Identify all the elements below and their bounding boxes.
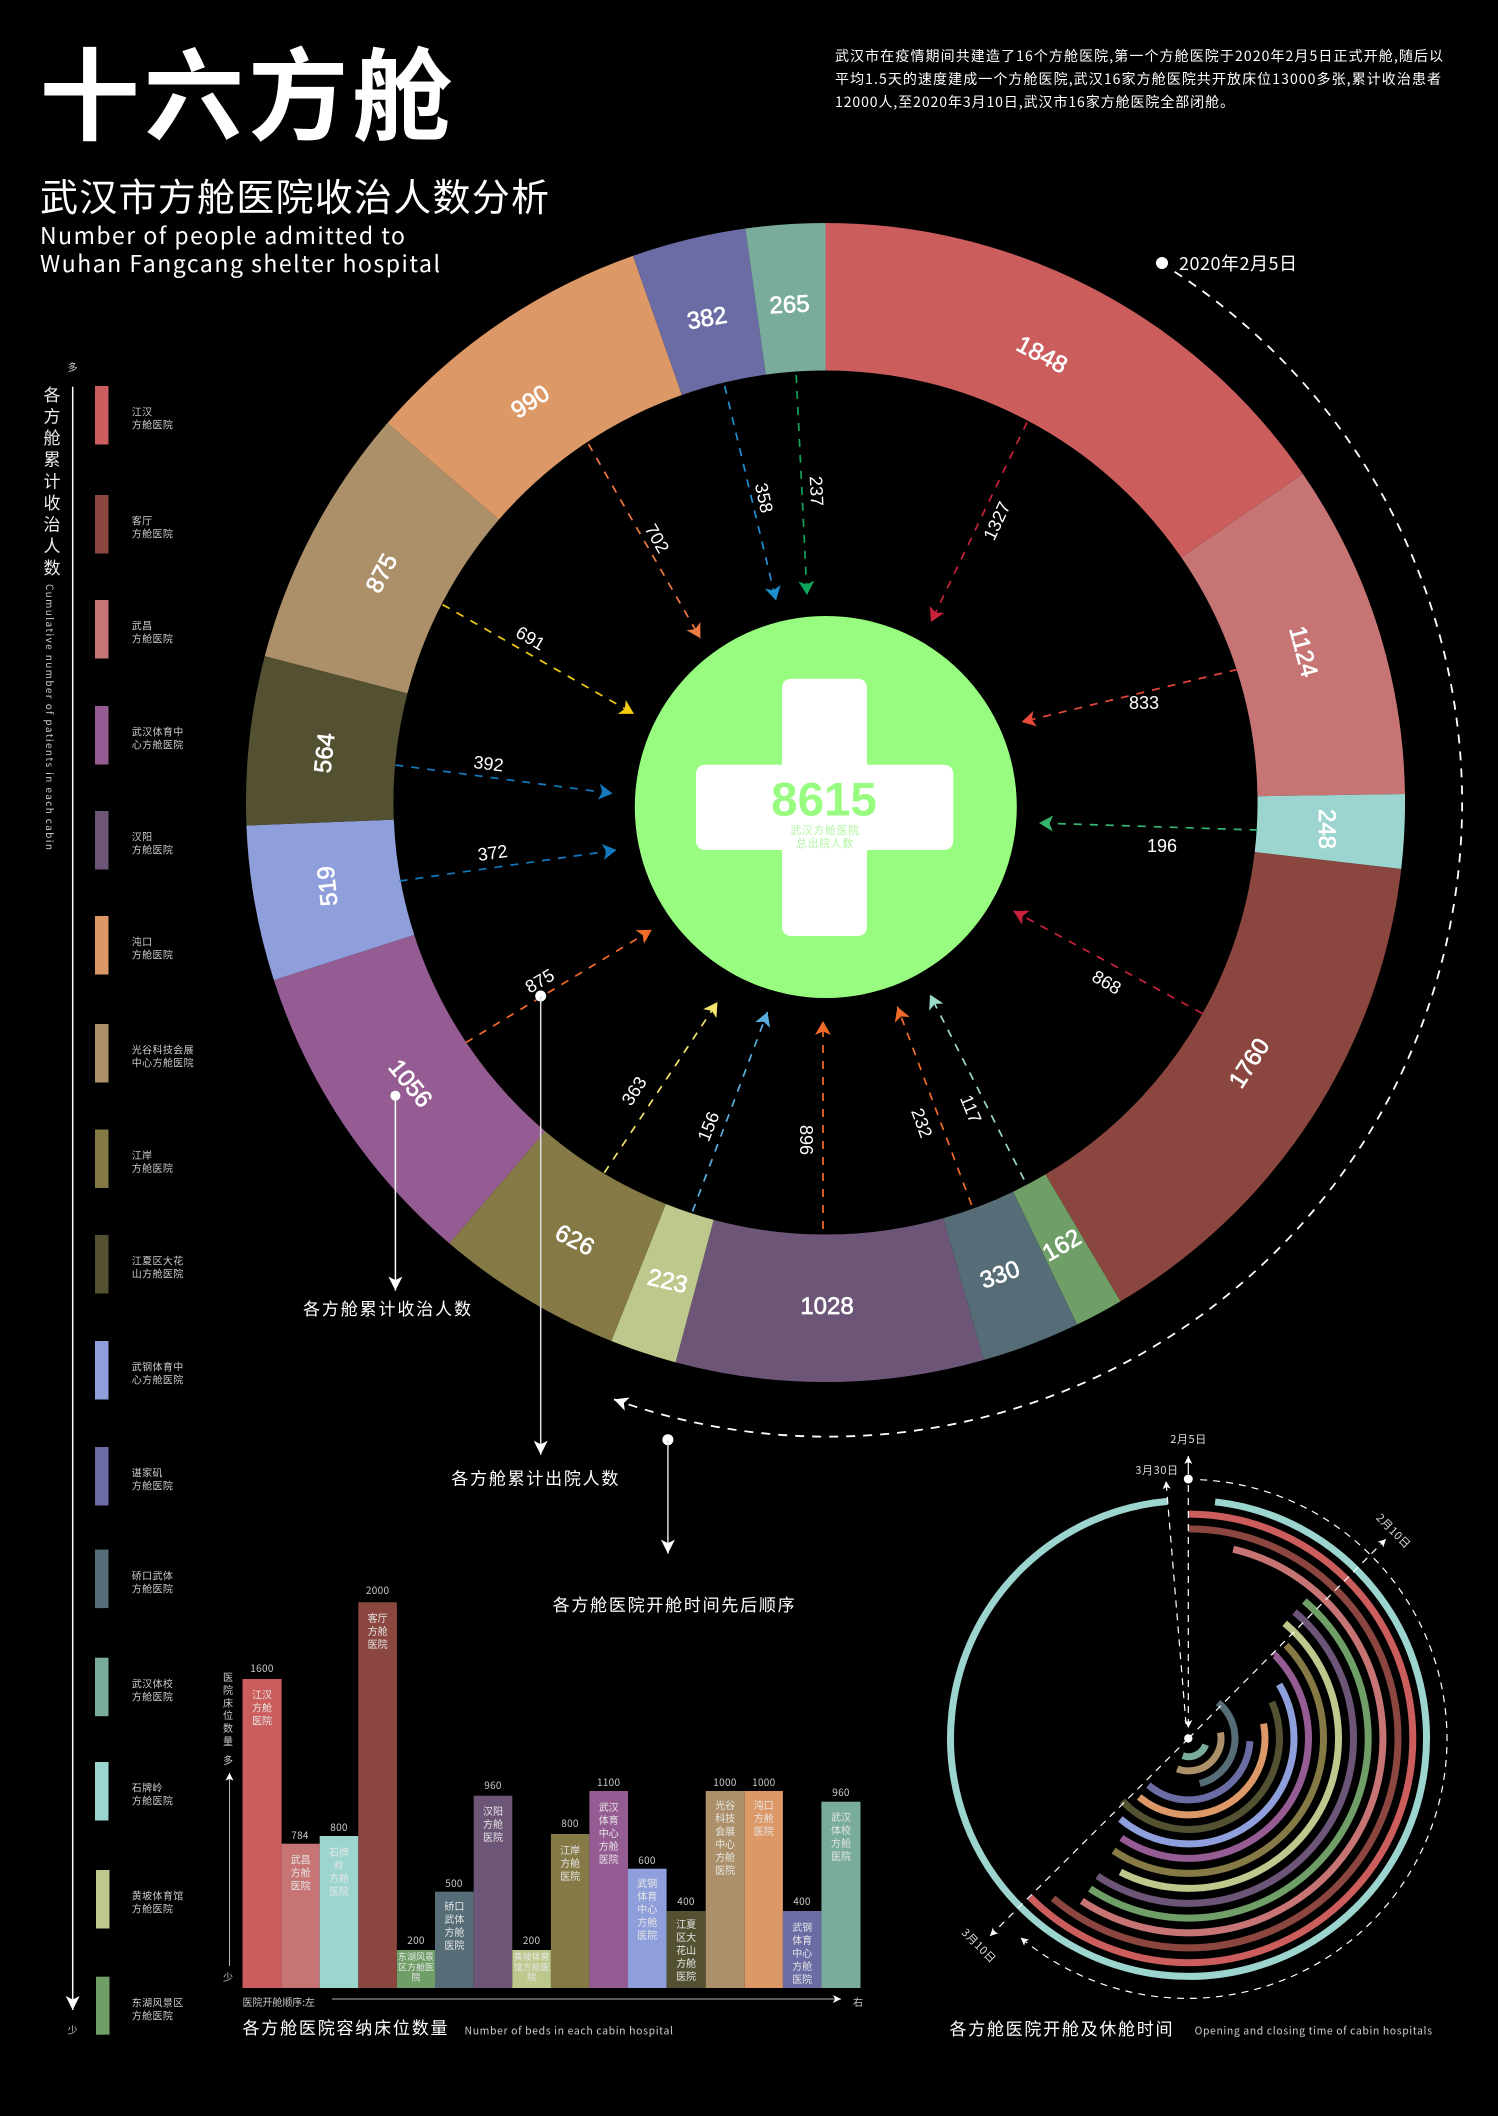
- bar names: 汉阳: [483, 1803, 503, 1818]
- bar names: 中心: [715, 1836, 735, 1851]
- left legend: axis and title: [43, 359, 78, 2037]
- bar names: 医院: [715, 1862, 735, 1877]
- donut segment values: 248: [1313, 809, 1340, 849]
- bar values: [250, 1582, 850, 1947]
- bar names: 武钢: [792, 1919, 812, 1934]
- discharge arrow values: 896: [796, 1125, 816, 1155]
- left legend: hospital swatches: 方舱医院: [132, 631, 173, 646]
- bar chart heading: [242, 2014, 673, 2039]
- bar names: 武昌: [291, 1852, 311, 1866]
- bar names: 医院: [444, 1937, 464, 1952]
- bar values: 784: [291, 1827, 309, 1842]
- radial chart date labels: 3月30日: [1135, 1462, 1179, 1478]
- bar names: 方舱: [368, 1623, 388, 1638]
- left legend: hospital swatches: 武昌: [132, 618, 153, 633]
- donut segment values: 519: [312, 865, 344, 907]
- bar values: 1100: [597, 1774, 621, 1789]
- discharge arrow values: 232: [907, 1105, 936, 1141]
- bar names: 医院: [252, 1712, 272, 1728]
- callout: cumulative admissions: 各方舱累计收治人数: [303, 1295, 471, 1320]
- left legend: hospital swatches: 方舱医院: [132, 417, 173, 432]
- donut segment values: 875: [361, 549, 403, 598]
- intro paragraph: 12000人,至2020年3月10日,武汉市16家方舱医院全部闭舱。: [835, 92, 1234, 112]
- bar names: 石牌: [329, 1844, 349, 1859]
- bar values: 1000: [752, 1774, 776, 1789]
- bar values: 1600: [250, 1660, 274, 1675]
- dashed arc arrow: [614, 272, 1462, 1437]
- vertical chinese title: 各方舱累计收治人数: [44, 381, 60, 579]
- left legend: hospital swatches: 方舱医院: [132, 1688, 173, 1703]
- vertical english title: Cumulative number of patients in each cabin: [43, 584, 58, 850]
- bar values: 600: [638, 1852, 656, 1867]
- bar names: 东湖风景: [398, 1950, 434, 1963]
- radial chart date labels: 3月10日: [958, 1925, 1000, 1967]
- donut segment values: 1124: [1283, 623, 1323, 680]
- english subtitle: Number of people admitted to: [40, 217, 405, 251]
- left legend: hospital swatches: 客厅: [132, 513, 153, 528]
- callout: cumulative discharges: [451, 990, 618, 1490]
- bar names: 方舱: [637, 1914, 657, 1929]
- bar names: 医院: [599, 1851, 619, 1866]
- bar names: 沌口: [754, 1797, 774, 1812]
- y axis: [223, 1669, 233, 1984]
- intro paragraph: 平均1.5天的速度建成一个方舱医院,武汉16家方舱医院共开放床位13000多张,累计收治患者: [835, 69, 1441, 89]
- left legend: hospital swatches: 石牌岭: [132, 1780, 163, 1795]
- bar names: 医院: [329, 1883, 349, 1898]
- bar names: 医院: [754, 1823, 774, 1838]
- bar names: 硚口: [444, 1898, 464, 1913]
- discharge arrow values: 363: [618, 1073, 651, 1109]
- bar names: 武钢: [637, 1875, 657, 1890]
- radial chart heading: 各方舱医院开舱及休舱时间: [950, 2015, 1172, 2040]
- bar names: 客厅: [368, 1610, 388, 1625]
- donut segment values: 1848: [1012, 331, 1072, 379]
- bar chart heading: 各方舱医院容纳床位数量: [242, 2014, 448, 2039]
- left legend: hospital swatches: 方舱医院: [132, 1160, 173, 1175]
- bar names: 体育: [637, 1888, 657, 1903]
- bar names: 方舱: [483, 1816, 503, 1831]
- x axis: 医院开舱顺序:左: [242, 1994, 315, 2009]
- radial chart heading: [950, 2015, 1432, 2040]
- discharge arrow values: 392: [472, 752, 505, 776]
- left legend: hospital swatches: 东湖风景区: [132, 1994, 184, 2009]
- left legend: hospital swatches: 硚口武体: [132, 1567, 173, 1582]
- callout: cumulative admissions: [303, 1091, 471, 1320]
- left legend: hospital swatches: 江岸: [132, 1147, 153, 1162]
- donut segment values: [309, 290, 1340, 1320]
- discharge arrow values: 156: [694, 1109, 723, 1144]
- bar values: 500: [445, 1875, 463, 1890]
- dashed radial guides: [990, 1480, 1447, 1998]
- bar names: 体育: [792, 1932, 812, 1947]
- bar names: 医院: [676, 1968, 696, 1983]
- callout: cumulative discharges: 各方舱累计出院人数: [451, 1464, 618, 1490]
- intro paragraph: [835, 46, 1443, 112]
- callout: opening order: [553, 1434, 795, 1616]
- left legend: hospital swatches: 心方舱医院: [132, 737, 184, 752]
- bar names: 方舱: [676, 1955, 696, 1970]
- discharge arrow values: 702: [641, 520, 673, 557]
- bar values: 2000: [366, 1582, 389, 1597]
- bar values: 400: [677, 1893, 695, 1908]
- left legend: hospital swatches: 方舱医院: [132, 1901, 173, 1916]
- bars: [242, 1602, 860, 1988]
- bar names: 区方舱医: [398, 1960, 434, 1973]
- bar names: 方舱: [792, 1958, 812, 1973]
- x axis: 右: [853, 1994, 863, 2009]
- donut segment values: 564: [309, 732, 341, 774]
- bar names: 院: [411, 1971, 421, 1984]
- bar names: 花山: [676, 1942, 696, 1957]
- left legend: hospital swatches: 汉阳: [132, 829, 153, 844]
- left legend: hospital swatches: 方舱医院: [132, 842, 173, 857]
- bar names: 武体: [444, 1911, 464, 1926]
- bar chart: beds in each hospital: [223, 1582, 863, 2009]
- discharge arrow values: 691: [512, 622, 548, 654]
- bar values: 200: [523, 1932, 541, 1947]
- left legend: hospital swatches: 方舱医院: [132, 2007, 173, 2022]
- chinese subtitle: 武汉市方舱医院收治人数分析: [40, 167, 549, 222]
- bar chart heading: Number of beds in each cabin hospital: [464, 2024, 673, 2038]
- more label: 多: [68, 359, 78, 374]
- title: 十六方舱: [40, 16, 452, 161]
- bar names: 黄坡体育: [514, 1950, 550, 1963]
- top arrow: [1187, 1456, 1189, 1474]
- opening order dashed arc with start date: [614, 250, 1462, 1437]
- intro paragraph: 武汉市在疫情期间共建造了16个方舱医院,第一个方舱医院于2020年2月5日正式开舱,随后以: [835, 46, 1443, 66]
- discharge arrow values: 358: [751, 481, 777, 515]
- y axis: 少: [223, 1969, 233, 1984]
- bar values: 960: [832, 1784, 850, 1799]
- bar names: 科技: [715, 1810, 735, 1825]
- english subtitle second line: Wuhan Fangcang shelter hospital: [40, 245, 440, 279]
- discharge arrow values: 237: [806, 475, 827, 507]
- discharge arrow values: 117: [956, 1092, 985, 1126]
- bar names: 馆方舱医: [514, 1960, 550, 1973]
- left legend: hospital swatches: 方舱医院: [132, 1793, 173, 1808]
- left legend: hospital swatches: 黄坡体育馆: [132, 1888, 184, 1903]
- radial chart date labels: [958, 1431, 1415, 1967]
- left legend: hospital swatches: 方舱医院: [132, 526, 173, 541]
- discharge arrow values: 1327: [979, 499, 1015, 543]
- start dot: [1156, 257, 1168, 269]
- left legend: hospital swatches: 方舱医院: [132, 1478, 173, 1493]
- bar names: 医院: [560, 1868, 580, 1883]
- left legend: hospital swatches: 武汉体育中: [132, 724, 184, 739]
- start and center dots: [1184, 1474, 1193, 1743]
- date label: 2020年2月5日: [1179, 250, 1297, 276]
- donut segment values: 223: [645, 1264, 690, 1299]
- bar values: 800: [330, 1819, 348, 1834]
- left legend: hospital swatches: 江夏区大花: [132, 1253, 184, 1268]
- x axis: [242, 1994, 863, 2009]
- bar names: 方舱: [715, 1849, 735, 1864]
- bar names: 武汉: [599, 1799, 619, 1814]
- donut segment values: 265: [769, 290, 810, 320]
- donut segment values: 1056: [383, 1054, 437, 1113]
- less label: 少: [68, 2022, 78, 2037]
- total discharged caption second line: 总出院人数: [796, 835, 854, 851]
- subtitle block: [40, 167, 549, 279]
- y axis: 多: [223, 1752, 233, 1767]
- bar names: 方舱: [560, 1855, 580, 1870]
- bar names: 江汉: [252, 1686, 272, 1702]
- donut chart: cumulative admissions: [320, 297, 1331, 1308]
- discharge arrow values: [472, 475, 1177, 1155]
- discharge arrow values: 372: [476, 841, 509, 865]
- bar names: 方舱: [754, 1810, 774, 1825]
- left legend: hospital swatches: 武钢体育中: [132, 1359, 184, 1374]
- bar names: 中心: [792, 1945, 812, 1960]
- radial chart date labels: 2月5日: [1170, 1431, 1207, 1447]
- radial chart date labels: 2月10日: [1373, 1510, 1415, 1552]
- y axis: 医院床位数量: [223, 1669, 233, 1748]
- bar names: 武汉: [831, 1809, 851, 1824]
- green circle: [635, 616, 1017, 998]
- bar names: 方舱: [329, 1870, 349, 1885]
- left legend: hospital swatches: 谌家矶: [132, 1465, 163, 1480]
- bar names: 体校: [831, 1822, 851, 1837]
- discharge arrow values: 868: [1089, 966, 1125, 999]
- bar values: 800: [561, 1815, 579, 1830]
- discharge arrow values: 875: [522, 965, 558, 997]
- left legend: hospital swatches: 中心方舱医院: [132, 1055, 194, 1070]
- bar names: 岭: [334, 1857, 344, 1872]
- bar names: 方舱: [444, 1924, 464, 1939]
- left legend: hospital swatches: [95, 386, 194, 2035]
- left legend: hospital swatches: 方舱医院: [132, 947, 173, 962]
- left legend: hospital swatches: 江汉: [132, 404, 153, 419]
- left legend: hospital swatches: 沌口: [132, 934, 153, 949]
- left legend: hospital swatches: 武汉体校: [132, 1675, 173, 1690]
- left legend: hospital swatches: 方舱医院: [132, 1580, 173, 1595]
- bar names: 医院: [792, 1971, 812, 1986]
- bar names: 医院: [831, 1848, 851, 1863]
- discharge arrows: [395, 375, 1258, 1229]
- discharge arrow values: 833: [1129, 693, 1159, 713]
- bar names: 光谷: [715, 1797, 735, 1812]
- total discharged number: 8615: [771, 774, 877, 826]
- bar names: 方舱: [291, 1864, 311, 1880]
- donut segment values: 162: [1038, 1224, 1086, 1267]
- bar values: 400: [793, 1893, 811, 1908]
- bar names: 体育: [599, 1812, 619, 1827]
- donut segment values: 626: [551, 1219, 599, 1262]
- donut segment values: 1760: [1224, 1034, 1275, 1093]
- bar names: 医院: [483, 1829, 503, 1844]
- bar names: 医院: [291, 1878, 311, 1892]
- bar names: 方舱: [831, 1835, 851, 1850]
- axis arrow: [72, 387, 74, 2010]
- donut segment values: 330: [977, 1255, 1023, 1295]
- discharge arrow values: 196: [1147, 836, 1177, 856]
- bar names: 江夏: [676, 1916, 696, 1931]
- bar names: 中心: [637, 1901, 657, 1916]
- bar values: 200: [407, 1932, 425, 1947]
- bar names: 会展: [715, 1823, 735, 1838]
- donut segment values: 382: [685, 302, 729, 335]
- callout: opening order: 各方舱医院开舱时间先后顺序: [553, 1591, 795, 1616]
- bar names: 院: [527, 1971, 536, 1984]
- bar names: 区大: [676, 1929, 696, 1944]
- white cross: [696, 679, 953, 936]
- bar names: 方舱: [599, 1838, 619, 1853]
- donut segment values: 990: [506, 380, 555, 424]
- total discharged caption: 武汉方舱医院: [790, 822, 860, 838]
- left legend: hospital swatches: 光谷科技会展: [132, 1042, 194, 1057]
- bar values: 1000: [713, 1774, 737, 1789]
- bar names: [252, 1610, 851, 1986]
- left legend: hospital swatches: 心方舱医院: [132, 1372, 184, 1387]
- donut segment values: 1028: [800, 1293, 854, 1320]
- left legend: hospital swatches: 山方舱医院: [132, 1266, 184, 1281]
- bar names: 中心: [599, 1825, 619, 1840]
- bar names: 医院: [637, 1927, 657, 1942]
- central green circle with cross: [635, 616, 1017, 998]
- radial chart: opening and closing time: [925, 1456, 1452, 2002]
- arcs per hospital: [925, 1475, 1452, 2002]
- radial chart heading: Opening and closing time of cabin hospitals: [1195, 2024, 1432, 2038]
- bar values: 960: [484, 1777, 502, 1792]
- bar names: 医院: [368, 1636, 388, 1651]
- bar names: 方舱: [252, 1700, 272, 1714]
- bar names: 江岸: [560, 1842, 580, 1857]
